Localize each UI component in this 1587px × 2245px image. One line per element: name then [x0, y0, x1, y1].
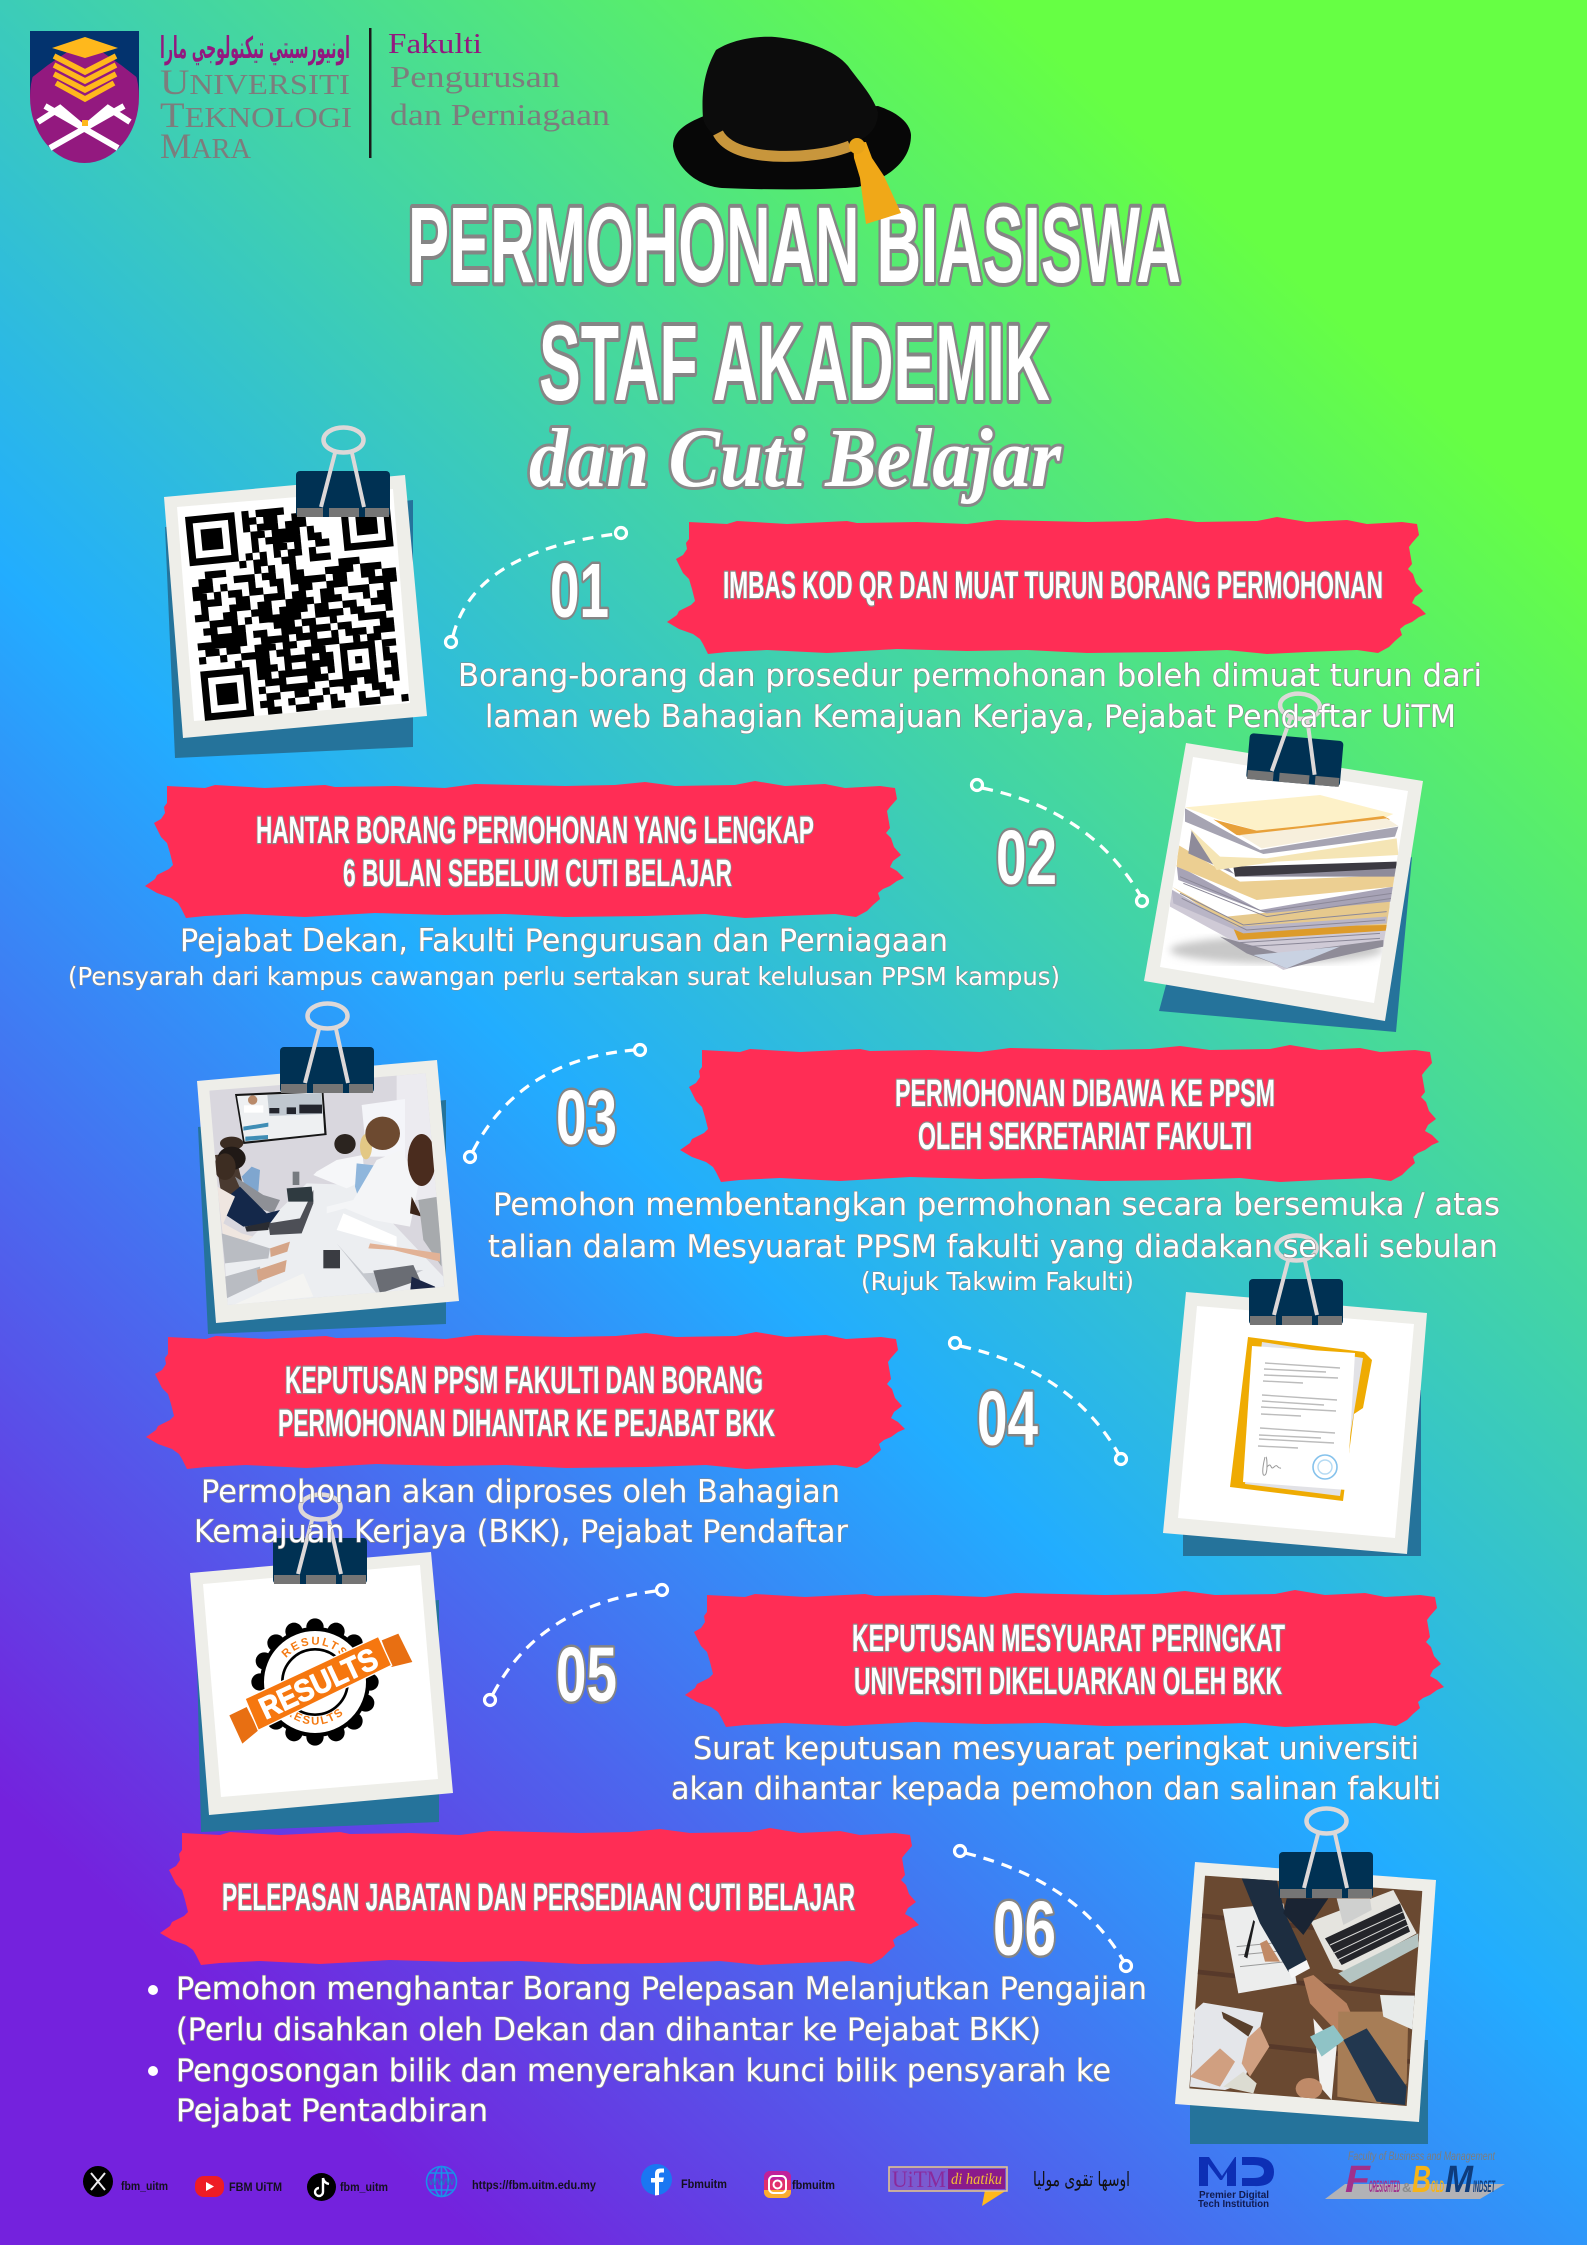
binder clip [1246, 690, 1347, 787]
step 2 number: 02 [996, 815, 1057, 901]
arrow: step 1 dashed curve [446, 528, 626, 648]
university name [160, 62, 352, 166]
icon: TikTok [307, 2173, 336, 2201]
photo: business handshake [1189, 1876, 1422, 2106]
logo: UiTM faculty logo [30, 28, 611, 166]
step 2 description: Pejabat Dekan, Fakulti Pengurusan dan Perniagaan [180, 923, 948, 959]
illustration: folder and signed letter [1230, 1337, 1372, 1501]
step 4 description: Kemajuan Kerjaya (BKK), Pejabat Pendaftar [194, 1514, 848, 1550]
step 4 banner [146, 1332, 905, 1469]
footer: social links [83, 2164, 835, 2201]
icon: YouTube [195, 2176, 224, 2197]
binder clip [273, 1494, 367, 1584]
Foresighted and Bold Mindset logo: M [1445, 2159, 1474, 2201]
Foresighted and Bold Mindset logo: INDSET [1473, 2177, 1496, 2196]
arrow: step 3 dashed curve [464, 1044, 646, 1162]
icon: UiTM crest [30, 31, 139, 163]
step 5 description [671, 1731, 1441, 1807]
Premier Digital logo: Tech Institution [1198, 2199, 1269, 2210]
step 3 banner: OLEH SEKRETARIAT FAKULTI [918, 1116, 1252, 1158]
step 6 banner [160, 1828, 919, 1965]
icon: X [83, 2166, 113, 2197]
step 1 banner [667, 517, 1426, 654]
step 1 description: laman web Bahagian Kemajuan Kerjaya, Pejabat Pendaftar UiTM [485, 699, 1456, 735]
arrow: step 4 dashed curve [950, 1338, 1126, 1464]
step 6 bullet list: Pejabat Pentadbiran [176, 2093, 488, 2129]
binder clip [296, 428, 390, 517]
binder clip [280, 1004, 374, 1093]
title [408, 184, 1181, 505]
icon: Facebook [641, 2164, 672, 2196]
Foresighted and Bold Mindset logo [1325, 2149, 1505, 2201]
Foresighted and Bold Mindset logo: & [1402, 2180, 1411, 2195]
website address: https://fbm.uitm.edu.my [472, 2178, 596, 2192]
step 4 banner: PERMOHONAN DIHANTAR KE PEJABAT BKK [278, 1403, 775, 1445]
step 2 card: stack of files [1144, 690, 1423, 1032]
icon: graduation hat [673, 37, 911, 224]
step 3 description: Pemohon membentangkan permohonan secara bersemuka / atas [493, 1187, 1500, 1223]
step 2 description [68, 923, 1060, 991]
photo: video conference meeting [210, 1076, 444, 1304]
YouTube handle: FBM UiTM [229, 2180, 282, 2194]
logo: UiTM faculty logo: اونيورسيتي تيكنولوجي مارا [160, 31, 350, 66]
QR code [185, 497, 409, 721]
step 5 description: akan dihantar kepada pemohon dan salinan fakulti [671, 1771, 1441, 1807]
arrow: step 5 dashed curve [484, 1584, 668, 1706]
UiTM di hatiku logo: di hatiku [951, 2171, 1002, 2188]
step 4 number: 04 [977, 1376, 1038, 1462]
step 3 number: 03 [556, 1075, 617, 1161]
faculty name [388, 28, 611, 132]
arrow: step 6 dashed curve [954, 1846, 1132, 1972]
step 3 card: meeting photo [197, 1004, 459, 1334]
icon: results badge: RESULTS [290, 1709, 342, 1725]
UiTM di hatiku logo [889, 2167, 1007, 2206]
Foresighted and Bold Mindset logo: F [1345, 2159, 1372, 2201]
step 2 banner: HANTAR BORANG PERMOHONAN YANG LENGKAP [256, 810, 814, 852]
icon: website globe [426, 2166, 456, 2197]
icon: results badge [229, 1618, 412, 1746]
step 3 banner: PERMOHONAN DIBAWA KE PPSM [895, 1073, 1275, 1115]
title: dan Cuti Belajar [529, 412, 1062, 505]
X handle: fbm_uitm [121, 2179, 168, 2193]
faculty name: Pengurusan [390, 59, 561, 94]
step 5 banner: UNIVERSITI DIKELUARKAN OLEH BKK [854, 1661, 1282, 1703]
step 6 bullet list [148, 1971, 1147, 2129]
university name: UNIVERSITI [160, 62, 350, 102]
Facebook handle: Fbmuitm [681, 2177, 727, 2191]
Foresighted and Bold Mindset logo: OLD [1431, 2177, 1444, 2196]
step 5 banner [685, 1590, 1444, 1727]
step 5 card: results stamp [190, 1492, 453, 1832]
step 4 description [194, 1474, 848, 1550]
step 5 description: Surat keputusan mesyuarat peringkat universiti [693, 1731, 1419, 1767]
step 3 description: talian dalam Mesyuarat PPSM fakulti yang diadakan sekali sebulan [488, 1229, 1498, 1265]
step 4 description: Permohonan akan diproses oleh Bahagian [201, 1474, 840, 1510]
Premier Digital logo [1198, 2157, 1274, 2210]
Premier Digital logo: Premier Digital [1199, 2190, 1269, 2201]
step 2 banner: 6 BULAN SEBELUM CUTI BELAJAR [343, 853, 732, 895]
icon: results badge: RESULTS [254, 1642, 383, 1726]
step 6 number: 06 [993, 1886, 1056, 1972]
Foresighted and Bold Mindset logo: Faculty of Business and Management [1348, 2149, 1495, 2163]
university name: MARA [160, 126, 251, 166]
step 3 description: (Rujuk Takwim Fakulti) [861, 1267, 1134, 1296]
Foresighted and Bold Mindset logo: ORESIGHTED [1369, 2177, 1400, 2196]
step 6 bullet list: (Perlu disahkan oleh Dekan dan dihantar ke Pejabat BKK) [176, 2012, 1041, 2048]
faculty name: Fakulti [388, 28, 482, 60]
step 4 banner: KEPUTUSAN PPSM FAKULTI DAN BORANG [285, 1360, 763, 1402]
step 1 description [458, 658, 1482, 735]
step 2 banner [145, 781, 904, 918]
faculty name: dan Perniagaan [390, 97, 611, 132]
binder clip [1249, 1236, 1343, 1325]
UiTM di hatiku logo: UiTM [892, 2167, 946, 2192]
icon: website globe: WWW [429, 2177, 455, 2187]
arrow: step 2 dashed curve [972, 780, 1148, 906]
title: STAF AKADEMIK [539, 302, 1050, 423]
step 6 bullet list: Pemohon menghantar Borang Pelepasan Melanjutkan Pengajian [176, 1971, 1147, 2007]
icon: results badge: RESULTS [281, 1636, 347, 1658]
step 2 description: (Pensyarah dari kampus cawangan perlu sertakan surat kelulusan PPSM kampus) [68, 962, 1060, 991]
illustration: file stack [1170, 795, 1398, 970]
step 5 banner: KEPUTUSAN MESYUARAT PERINGKAT [852, 1618, 1285, 1660]
step 6 bullet list: Pengosongan bilik dan menyerahkan kunci bilik pensyarah ke [176, 2053, 1111, 2089]
Instagram handle: fbmuitm [792, 2178, 835, 2192]
Foresighted and Bold Mindset logo: B [1412, 2159, 1431, 2201]
binder clip [1279, 1808, 1373, 1898]
footer: partner logos [889, 2149, 1505, 2210]
icon: Instagram [764, 2171, 791, 2198]
step 1 number: 01 [550, 548, 609, 634]
step 6 card: handshake photo [1175, 1808, 1436, 2144]
university name: TEKNOLOGI [160, 95, 352, 135]
step 4 card: document folder [1163, 1236, 1427, 1556]
step 3 banner [680, 1045, 1439, 1182]
step 1 description: Borang-borang dan prosedur permohonan boleh dimuat turun dari [458, 658, 1482, 694]
step 3 description [488, 1187, 1500, 1296]
motto in jawi: اوسها تقوى موليا [1033, 2167, 1130, 2191]
step 6 banner: PELEPASAN JABATAN DAN PERSEDIAAN CUTI BELAJAR [222, 1877, 855, 1919]
TikTok handle: fbm_uitm [340, 2180, 388, 2194]
step 5 number: 05 [556, 1632, 617, 1718]
step 1 card: QR code [164, 428, 427, 758]
